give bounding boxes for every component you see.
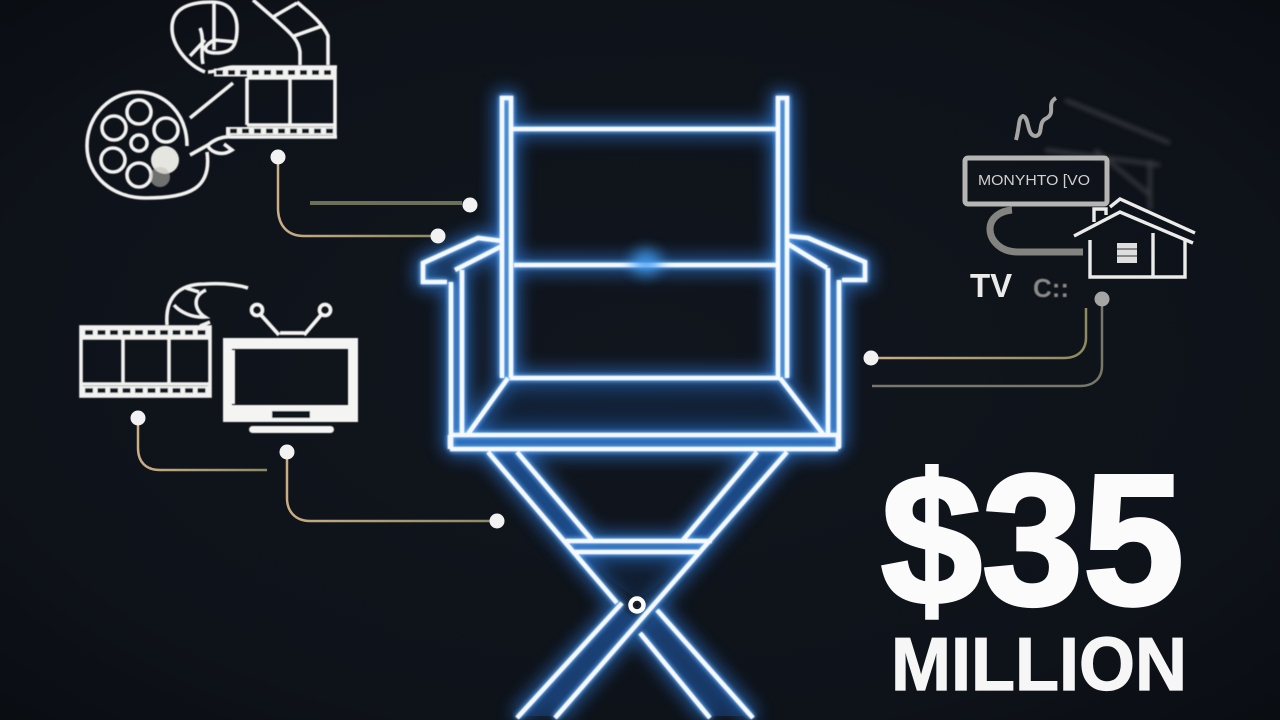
chair glow [423, 98, 865, 718]
chair centre flare [631, 249, 661, 275]
sign label: MONYHTO [VO [978, 173, 1090, 189]
film reel [87, 92, 208, 198]
house [1074, 199, 1195, 277]
curved pipe [990, 210, 1083, 252]
connector: film reel lower line [270, 150, 446, 244]
strip curl [167, 284, 248, 326]
connector: television line [280, 444, 504, 528]
connector: sign upper line [864, 308, 1086, 366]
tv antennas [252, 304, 330, 335]
film strip [190, 67, 337, 155]
icon: faded sign and house [965, 98, 1195, 304]
connector: sign lower line [872, 292, 1110, 386]
connector: film strip line [130, 410, 267, 470]
faint roof shadow [1045, 100, 1170, 210]
tv screen highlight [232, 350, 235, 404]
tv slot [272, 411, 310, 418]
sign frame [965, 158, 1107, 204]
headline figure: $35 [881, 437, 1184, 644]
tv body [223, 338, 358, 422]
faded label: C:: [1033, 273, 1069, 303]
icon: film strip with curl [81, 284, 248, 396]
icon: television [223, 304, 358, 433]
strip body [81, 327, 210, 396]
tv stand [249, 426, 334, 433]
director's chair neon icon [423, 98, 865, 718]
film curl [172, 0, 328, 72]
seat and leg blue fills [453, 100, 836, 716]
connector: film reel upper line [310, 198, 478, 212]
tv label: TV [970, 267, 1012, 304]
chair bright lines [423, 98, 865, 718]
icon: film reel and strip [87, 0, 337, 198]
headline unit: MILLION [891, 622, 1187, 706]
chair blue halo [423, 98, 865, 718]
chair pivot [630, 598, 644, 612]
smoke squiggle [1016, 98, 1056, 140]
